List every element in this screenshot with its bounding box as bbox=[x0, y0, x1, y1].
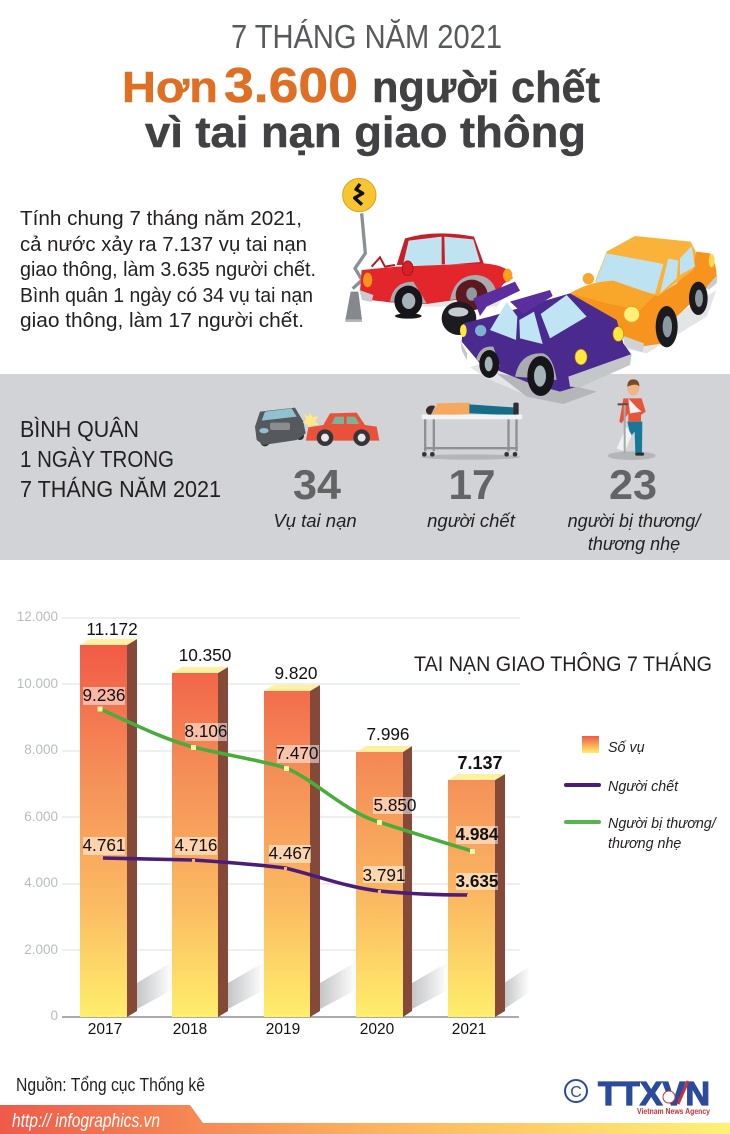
value labels bbox=[82, 619, 503, 891]
icon: loose tire bbox=[442, 302, 476, 335]
legend: Người chết bbox=[608, 779, 679, 795]
value labels: 9.236 bbox=[82, 685, 126, 705]
value labels: 10.350 bbox=[179, 645, 231, 665]
title: vì tai nạn giao thông bbox=[145, 108, 586, 157]
value labels: 4.716 bbox=[174, 835, 218, 855]
footer band: http:// infographics.vn bbox=[12, 1111, 160, 1132]
y axis labels: 12.000 bbox=[17, 609, 58, 624]
value labels: 5.850 bbox=[373, 795, 417, 815]
stat: deaths: 17 bbox=[448, 461, 496, 508]
y axis labels: 4.000 bbox=[24, 875, 58, 890]
stat: accidents: 34 bbox=[293, 461, 342, 508]
title: 3.600 bbox=[224, 59, 358, 113]
x axis labels: 2017 bbox=[88, 1021, 122, 1038]
bar 2021 bbox=[448, 774, 505, 1017]
stat: deaths: người chết bbox=[427, 510, 516, 531]
line: deaths bbox=[103, 858, 470, 897]
value labels: 3.635 bbox=[455, 871, 499, 891]
intro text: Tính chung 7 tháng năm 2021, bbox=[20, 207, 302, 230]
footer band bbox=[0, 1105, 730, 1134]
bar 2020 bbox=[356, 746, 412, 1017]
icon: red car bbox=[359, 233, 513, 319]
value labels: 7.470 bbox=[275, 743, 319, 763]
intro text: giao thông, làm 3.635 người chết. bbox=[20, 258, 316, 281]
y axis labels: 8.000 bbox=[24, 742, 58, 757]
stat: injured: thương nhẹ bbox=[588, 534, 680, 554]
bar 2019 bbox=[264, 685, 320, 1017]
title: 7 THÁNG NĂM 2021 bbox=[231, 18, 502, 55]
stat: accidents bbox=[273, 461, 357, 531]
panel: daily average band bbox=[0, 374, 730, 560]
chart title: TAI NẠN GIAO THÔNG 7 THÁNG bbox=[414, 651, 712, 676]
line: injured bbox=[98, 706, 475, 854]
x axis labels: 2018 bbox=[173, 1021, 207, 1038]
axis and grid bbox=[62, 618, 520, 950]
value labels: 3.791 bbox=[362, 865, 406, 885]
icon: road sign bbox=[343, 178, 376, 322]
value labels: 11.172 bbox=[86, 619, 138, 639]
value labels: 4.984 bbox=[455, 824, 499, 844]
intro text bbox=[20, 207, 316, 332]
value labels: 7.137 bbox=[457, 753, 503, 773]
icon: injured man bbox=[608, 379, 656, 460]
logo: TTXVN: C bbox=[570, 1084, 582, 1101]
floor shadows bbox=[137, 962, 530, 1009]
bar 2017 bbox=[80, 639, 137, 1017]
legend: thương nhẹ bbox=[608, 836, 681, 852]
value labels: 9.820 bbox=[274, 663, 318, 683]
value labels: 4.467 bbox=[268, 843, 312, 863]
heading: daily average bbox=[20, 416, 221, 502]
y axis labels bbox=[17, 609, 58, 1023]
icon: purple car bbox=[460, 282, 632, 396]
logo: TTXVN: Vietnam News Agency bbox=[637, 1106, 710, 1116]
intro text: giao thông, làm 17 người chết. bbox=[20, 309, 304, 332]
label backgrounds bbox=[83, 687, 498, 890]
y axis labels: 6.000 bbox=[24, 809, 58, 824]
heading: daily average: 1 NGÀY TRONG bbox=[20, 446, 174, 472]
bar 2018 bbox=[172, 667, 228, 1017]
stat: injured: người bị thương/ bbox=[568, 511, 702, 531]
heading: daily average: 7 THÁNG NĂM 2021 bbox=[20, 476, 221, 502]
logo: TTXVN bbox=[565, 1075, 710, 1116]
stat icons bbox=[255, 379, 656, 460]
stat: deaths bbox=[427, 461, 516, 531]
icon: orange car bbox=[570, 236, 717, 352]
stat: injured bbox=[568, 461, 702, 554]
source: Nguồn: Tổng cục Thống kê bbox=[16, 1075, 205, 1095]
title bbox=[122, 18, 600, 157]
stat: injured: 23 bbox=[609, 461, 657, 508]
x axis labels: 2020 bbox=[360, 1021, 395, 1038]
value labels: 7.996 bbox=[366, 724, 410, 744]
value labels: 8.106 bbox=[184, 721, 228, 741]
y axis labels: 10.000 bbox=[17, 676, 58, 691]
legend: Số vụ bbox=[608, 740, 645, 756]
x axis labels: 2019 bbox=[266, 1021, 300, 1038]
icon: collision bbox=[255, 408, 379, 446]
heading: daily average: BÌNH QUÂN bbox=[20, 416, 139, 442]
title: người chết bbox=[372, 63, 600, 112]
chart: traffic accidents 7 months bbox=[17, 609, 530, 1038]
stat: accidents: Vụ tai nạn bbox=[273, 510, 357, 531]
legend bbox=[566, 736, 718, 852]
shadows bbox=[373, 283, 717, 397]
intro text: Bình quân 1 ngày có 34 vụ tai nạn bbox=[20, 284, 313, 307]
x axis labels bbox=[88, 1021, 486, 1038]
x axis labels: 2021 bbox=[452, 1021, 486, 1038]
intro text: cả nước xảy ra 7.137 vụ tai nạn bbox=[20, 233, 307, 256]
y axis labels: 0 bbox=[50, 1008, 58, 1023]
logo: TTXVN: TTXVN bbox=[598, 1075, 710, 1112]
legend: Người bị thương/ bbox=[608, 816, 718, 832]
value labels: 4.761 bbox=[82, 835, 126, 855]
y axis labels: 2.000 bbox=[24, 942, 58, 957]
title: Hơn bbox=[122, 63, 218, 112]
icon: stretcher bbox=[421, 403, 522, 460]
illustration: car crash bbox=[343, 178, 717, 404]
